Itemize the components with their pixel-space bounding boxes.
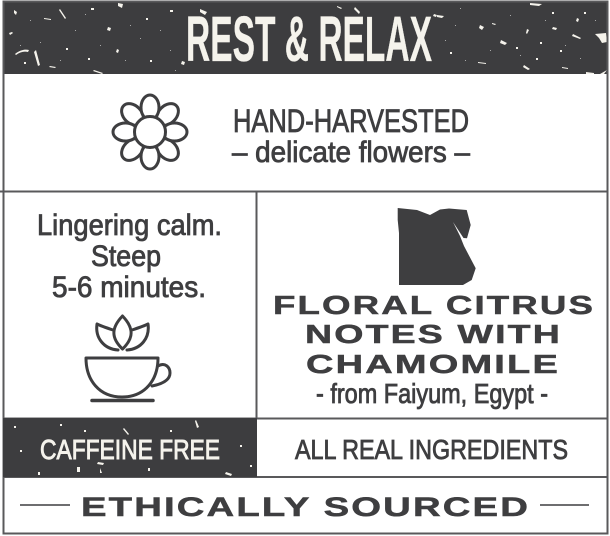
steep text: Steep [91,240,161,273]
badge: caffeine free [3,418,257,477]
harvest text: HAND-HARVESTED [233,103,469,139]
footer: ethically sourced: ETHICALLY SOURCED [81,492,530,522]
steep text: 5-6 minutes. [52,271,206,304]
flavor heading: CHAMOMILE [306,349,560,379]
badge: caffeine free: CAFFEINE FREE [40,434,220,465]
grid dividers [0,191,608,477]
steep text [37,209,222,304]
steep text: Lingering calm. [37,209,222,242]
flavor heading [273,290,595,379]
header banner [3,1,608,74]
harvest text [232,103,470,169]
flavor heading: FLORAL CITRUS [273,290,595,320]
origin text: - from Faiyum, Egypt - [316,378,548,409]
icon: flower [113,95,187,169]
flavor heading: NOTES WITH [305,319,562,349]
icon: teacup with leaves [86,316,170,400]
map: Egypt [398,208,476,285]
harvest text: – delicate flowers – [232,136,470,169]
